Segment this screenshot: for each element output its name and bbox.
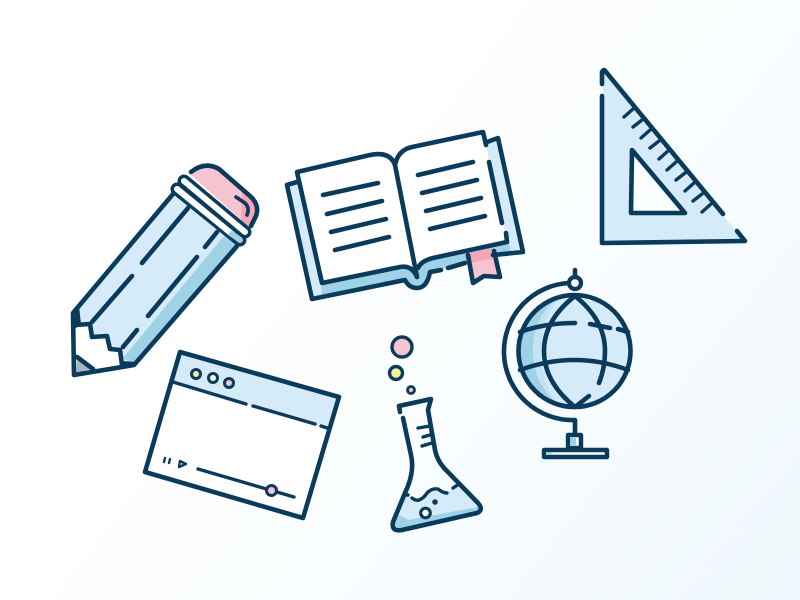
icon: pencil (71, 166, 257, 375)
icon: globe (504, 270, 630, 457)
icon: flask with bubbles (390, 337, 481, 530)
icon: video player window (145, 352, 339, 518)
icon: open book (287, 132, 523, 299)
icon: set square ruler (602, 70, 745, 243)
